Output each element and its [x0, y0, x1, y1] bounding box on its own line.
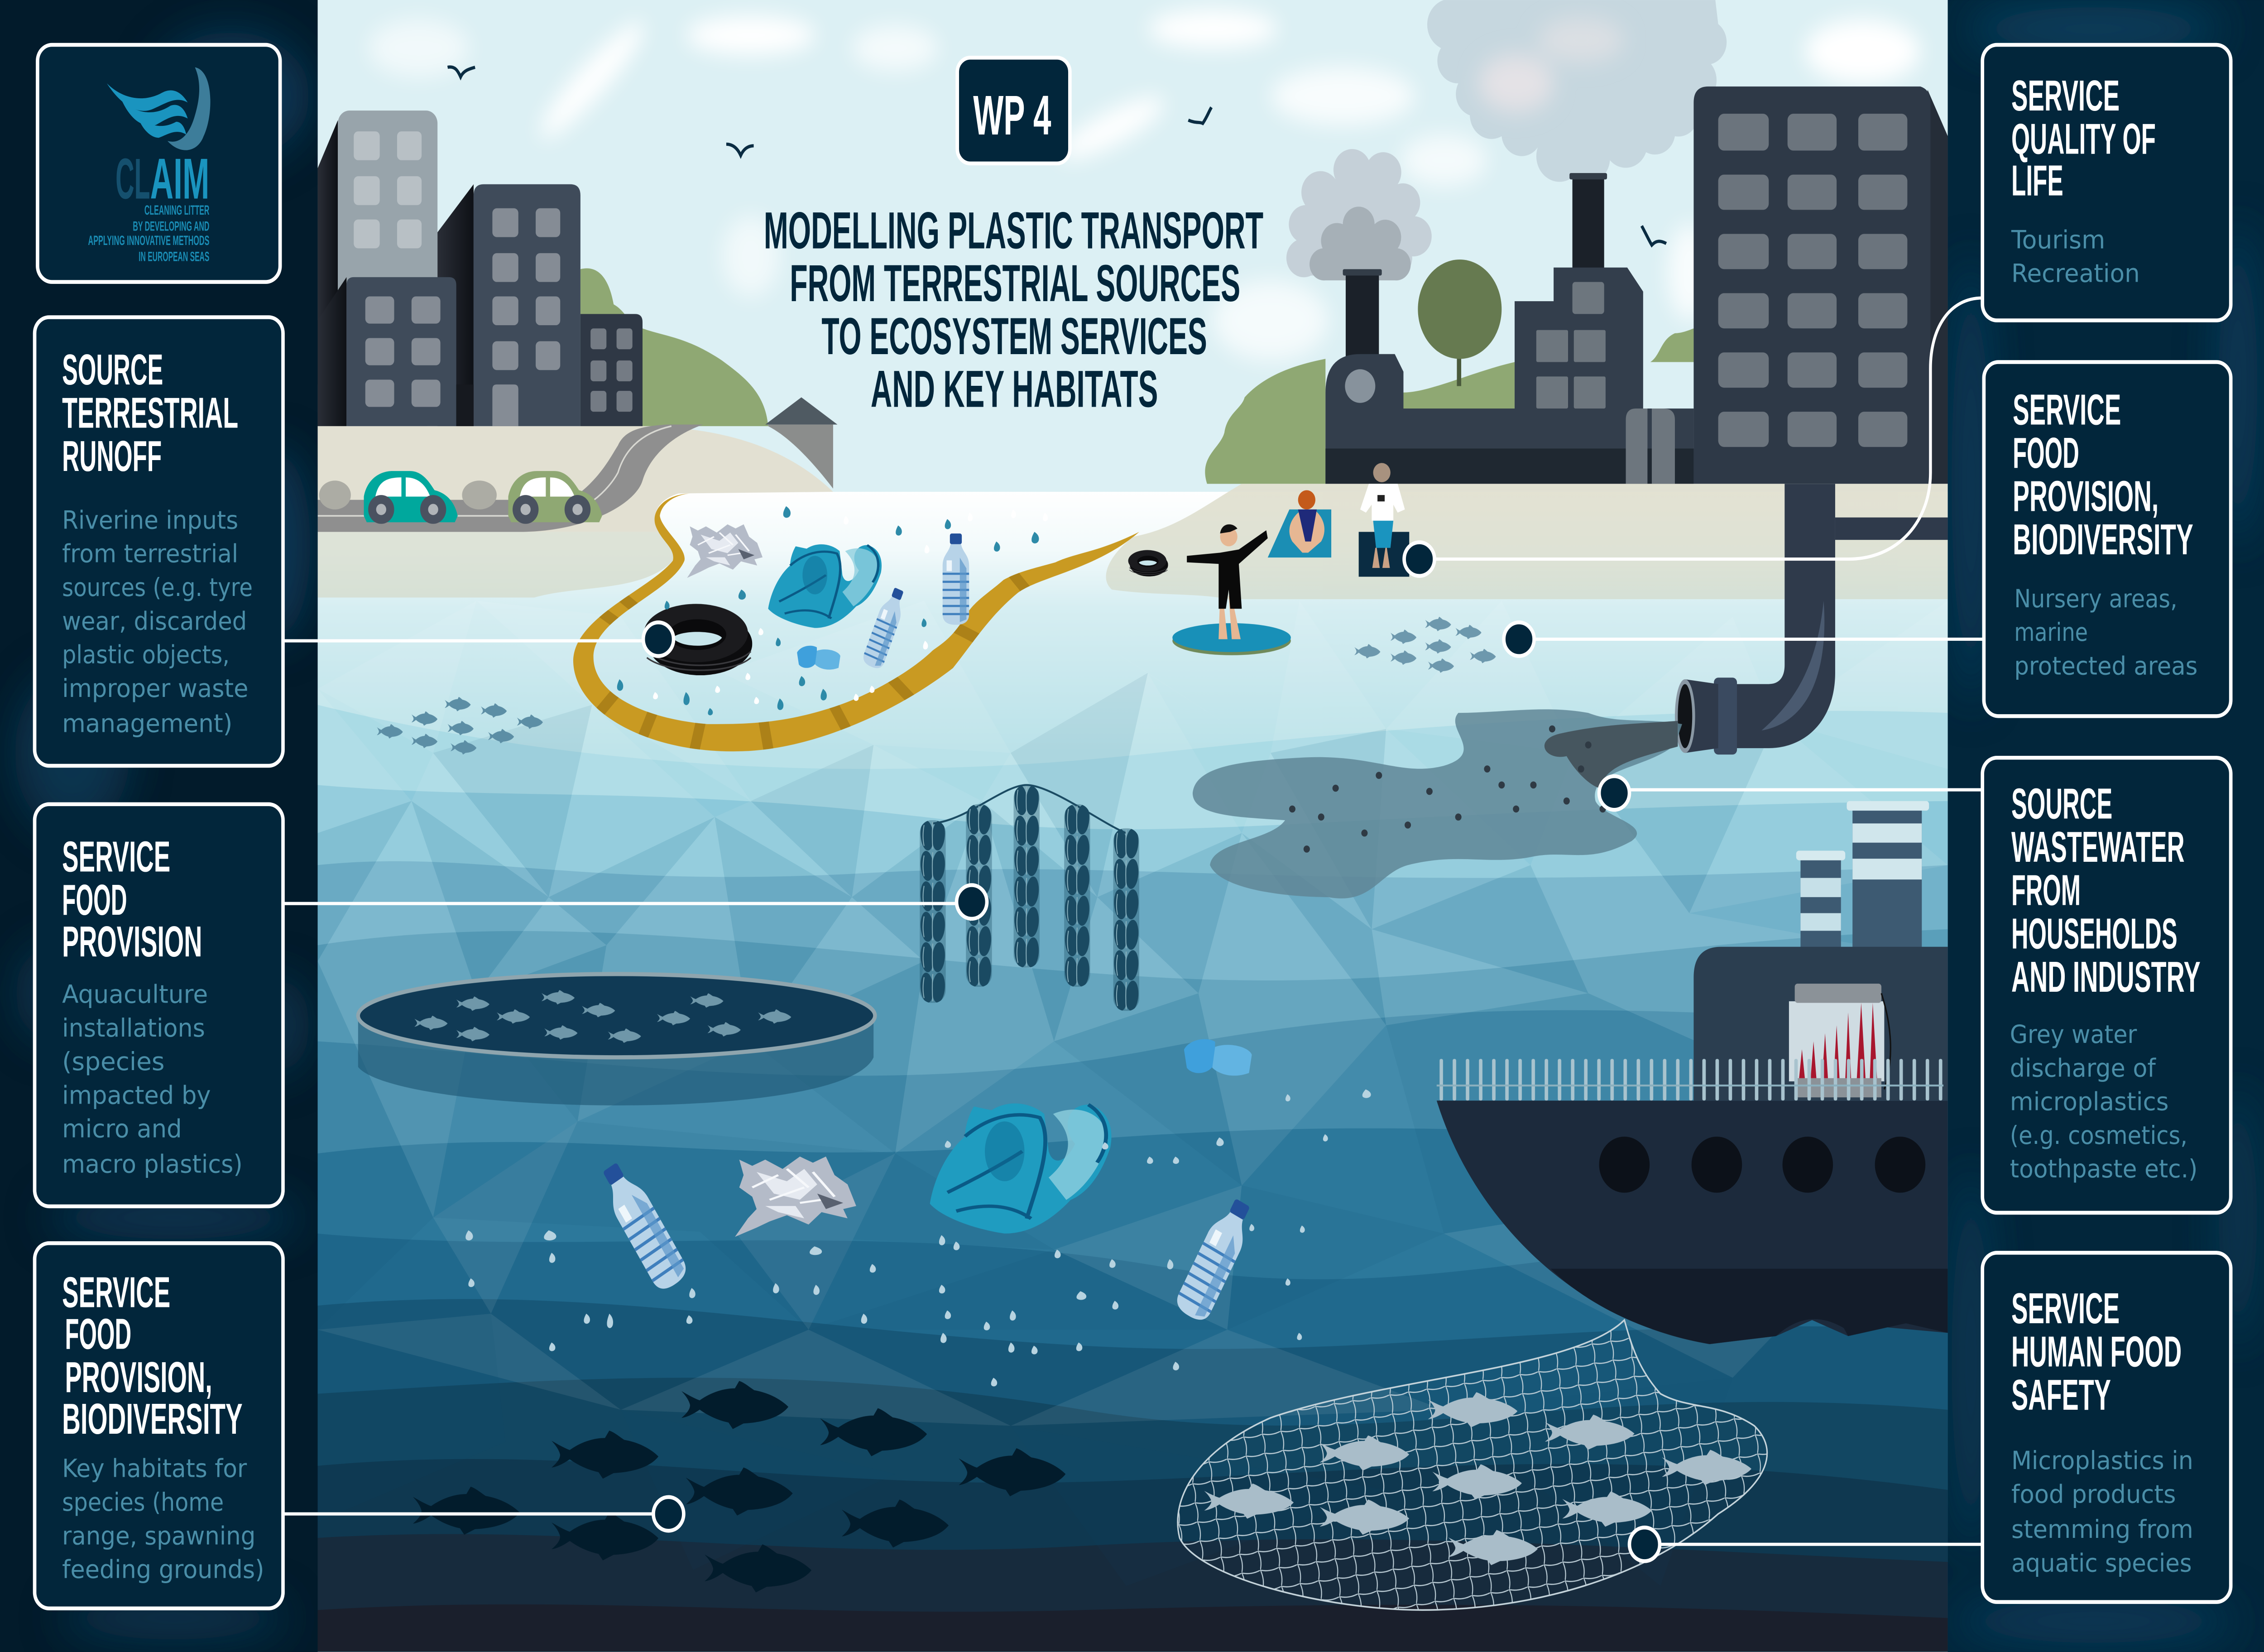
panel: service food provision biodiversity left: SERVICE [62, 1269, 170, 1317]
car: green [508, 471, 602, 524]
car: teal [364, 471, 458, 524]
panel: service food provision biodiversity right: marine [2014, 619, 2088, 647]
logo panel: APPLYING INNOVATIVE METHODS [88, 233, 209, 249]
WP 4 badge [957, 58, 1070, 163]
city buildings [318, 110, 643, 426]
panel: service food provision biodiversity left: BIODIVERSITY [62, 1395, 243, 1443]
small tire on beach [1128, 550, 1168, 576]
factory smoke [1286, 0, 1727, 280]
panel: service food provision: micro and [62, 1115, 182, 1143]
panel: source terrestrial runoff: Riverine inputs [62, 506, 238, 535]
main title: FROM TERRESTRIAL SOURCES [790, 255, 1240, 312]
logo panel: CL [115, 146, 150, 211]
exhaust smoke [319, 480, 497, 509]
sand left shallow [318, 532, 674, 598]
aquaculture cage [358, 974, 875, 1105]
bottle: tilted [861, 585, 909, 671]
side panel background: right [1948, 0, 2264, 1652]
connector lines [283, 298, 1982, 1544]
bushes and tree [1205, 259, 1693, 484]
logo panel [38, 45, 280, 282]
panel: source terrestrial runoff: from terrestrial [62, 540, 238, 568]
panel: service human food safety [1982, 1253, 2231, 1602]
panel: service food provision: PROVISION [62, 918, 202, 966]
fish school near shore [1354, 617, 1496, 673]
panel: service food provision: SERVICE [62, 833, 170, 881]
dark fish habitat [413, 1381, 1065, 1592]
fish school left [377, 697, 543, 754]
tire in river [644, 604, 752, 675]
underwater bottle right [1173, 1193, 1259, 1325]
panel: source wastewater: microplastics [2010, 1088, 2169, 1116]
ocean water [318, 492, 1948, 1652]
bottle caps [797, 646, 840, 670]
panel: service food provision: installations [62, 1014, 205, 1042]
underwater bag [930, 1104, 1111, 1234]
panel: service food provision biodiversity left: Key habitats for [62, 1455, 247, 1483]
panel: service food provision biodiversity left [35, 1243, 283, 1609]
panel: source wastewater: SOURCE [2011, 780, 2112, 828]
panel: service food provision: Aquaculture [62, 980, 208, 1009]
panel: service food provision biodiversity right: SERVICE [2013, 386, 2121, 434]
sand left upper [318, 426, 833, 532]
fishing net [1178, 1320, 1767, 1610]
panel: service food provision biodiversity right: FOOD [2013, 429, 2079, 477]
sand right [1106, 484, 1948, 599]
panel: service food provision biodiversity left: PROVISION, [65, 1354, 212, 1402]
panel: service food provision: (species [62, 1048, 165, 1076]
panel: source terrestrial runoff: RUNOFF [62, 432, 162, 480]
main title: MODELLING PLASTIC TRANSPORT [764, 202, 1263, 260]
panel: service human food safety: food products [2011, 1480, 2176, 1509]
outflow pipe [1675, 484, 1948, 754]
radiator [1789, 984, 1890, 1097]
river microplastic particles [617, 506, 1039, 716]
surfer on board [1172, 524, 1291, 655]
panel: service quality of life [1982, 45, 2231, 321]
logo panel: IN EUROPEAN SEAS [139, 249, 209, 264]
panel: service food provision biodiversity right: protected areas [2014, 652, 2197, 681]
panel: source wastewater: discharge of [2010, 1054, 2156, 1083]
panel: service human food safety: Microplastics in [2011, 1447, 2193, 1475]
panel: service food provision biodiversity right: Nursery areas, [2014, 585, 2178, 613]
underwater bottle left [595, 1157, 691, 1295]
main title: AND KEY HABITATS [871, 360, 1158, 418]
panel: service human food safety: aquatic species [2011, 1549, 2192, 1578]
logo panel: BY DEVELOPING AND [133, 219, 209, 234]
ship [1437, 801, 1948, 1344]
birds [448, 67, 1666, 245]
panel: source wastewater: toothpaste etc.) [2010, 1155, 2197, 1184]
panel: source wastewater: Grey water [2010, 1021, 2137, 1049]
panel: service human food safety: stemming from [2011, 1516, 2193, 1544]
panel: service food provision biodiversity left: range, spawning [62, 1522, 255, 1551]
panel: service food provision [35, 804, 283, 1206]
underwater plastic film [735, 1157, 856, 1237]
panel: source terrestrial runoff: sources (e.g. tyre [62, 574, 253, 602]
panel: service food provision: impacted by [62, 1081, 211, 1110]
panel: service food provision biodiversity left: species (home [62, 1489, 224, 1517]
main title: TO ECOSYSTEM SERVICES [821, 307, 1207, 365]
oil slick wastewater [1193, 709, 1682, 898]
panel: service human food safety: SERVICE [2011, 1285, 2120, 1333]
panel: source terrestrial runoff: improper waste [62, 674, 248, 703]
panel: service quality of life: SERVICE [2011, 72, 2120, 120]
plastic bag [768, 544, 882, 628]
panel: service food provision biodiversity left: FOOD [65, 1311, 131, 1359]
bottle: upright [943, 533, 969, 625]
river [573, 494, 1139, 756]
factory [1325, 173, 1693, 484]
panel: service quality of life: Recreation [2011, 259, 2140, 288]
WP 4 badge: WP 4 [973, 84, 1051, 146]
main title [764, 202, 1263, 418]
panel: source terrestrial runoff: management) [62, 710, 232, 738]
side panel background: left [0, 0, 318, 1652]
panel: service quality of life: LIFE [2011, 157, 2063, 205]
standing tourist [1359, 463, 1409, 577]
marker dots [643, 542, 1660, 1561]
logo panel: CLEANING LITTER [144, 203, 210, 218]
panel: source terrestrial runoff: SOURCE [62, 346, 163, 394]
panel: service food provision: FOOD [62, 876, 127, 924]
plastic film in river [687, 524, 763, 578]
panel: source wastewater: (e.g. cosmetics, [2010, 1121, 2187, 1150]
underwater microplastics [465, 1090, 1371, 1386]
panel: source terrestrial runoff: wear, discarded [62, 607, 247, 636]
underwater caps [1184, 1039, 1252, 1076]
panel: service human food safety: SAFETY [2011, 1371, 2111, 1419]
mussel lines [920, 785, 1139, 1011]
logo emblem [107, 67, 211, 150]
panel: source wastewater [1982, 758, 2231, 1213]
green hill behind city [580, 268, 768, 426]
panel: source terrestrial runoff: plastic objects, [62, 641, 230, 669]
tower building [1693, 86, 1948, 484]
panel: service food provision: macro plastics) [62, 1150, 243, 1179]
panel: service food provision biodiversity right [1984, 362, 2231, 716]
road [318, 424, 703, 532]
panel: source terrestrial runoff [35, 317, 283, 766]
panel: service quality of life: QUALITY OF [2011, 115, 2156, 163]
panel: service food provision biodiversity left: feeding grounds) [62, 1556, 264, 1584]
panel: source terrestrial runoff: TERRESTRIAL [62, 389, 238, 437]
panel: source wastewater: FROM [2011, 867, 2081, 915]
sky [318, 0, 1948, 528]
logo panel: AIM [150, 146, 209, 211]
person on towel [1268, 490, 1331, 557]
panel: service food provision biodiversity right: PROVISION, [2013, 472, 2158, 521]
panel: service quality of life: Tourism [2011, 226, 2105, 255]
silo [765, 397, 837, 489]
